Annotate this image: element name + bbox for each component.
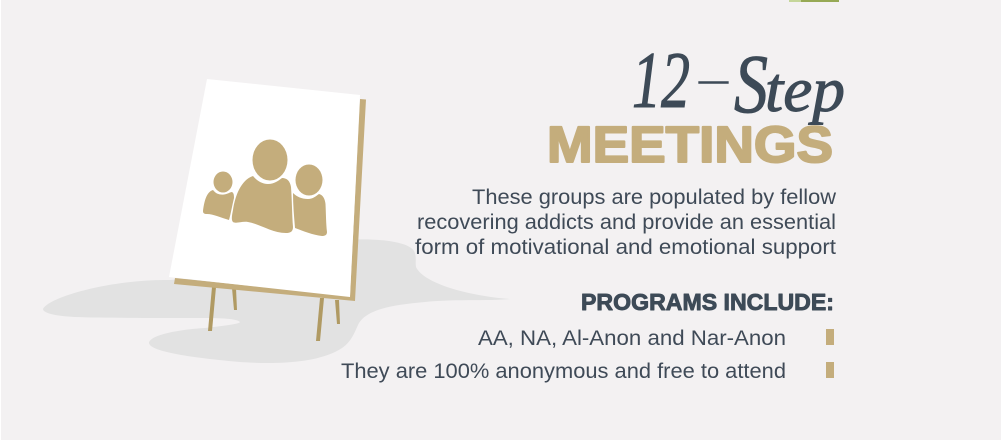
description paragraph: recovering addicts and provide an essential <box>417 210 836 234</box>
easel front legs <box>208 287 324 341</box>
description paragraph: form of motivational and emotional support <box>415 235 836 259</box>
white board <box>169 79 360 297</box>
title: MEETINGS: MEETINGS <box>547 116 833 173</box>
easel <box>169 79 366 341</box>
right person <box>293 164 327 236</box>
title: 12-Step: 12 <box>632 37 690 125</box>
description paragraph <box>415 185 836 259</box>
title: 12-Step: tep <box>765 54 845 125</box>
description paragraph: These groups are populated by fellow <box>472 185 836 209</box>
heading: programs include: PROGRAMS INCLUDE: <box>581 289 834 315</box>
icon: group of people <box>203 140 327 236</box>
list item 1: AA, NA, Al-Anon and Nar-Anon <box>478 326 786 350</box>
title: 12-Step <box>632 37 845 131</box>
centre person <box>232 140 293 233</box>
title: 12-Step: S <box>734 38 768 131</box>
grey floor shadow <box>43 239 510 363</box>
list item 2: They are 100% anonymous and free to attend <box>341 359 786 383</box>
green clipped fragment at top <box>789 0 839 2</box>
easel back legs <box>232 288 340 324</box>
title: 12-Step: – <box>698 56 729 101</box>
left person <box>203 172 234 220</box>
easel tan frame <box>174 99 366 301</box>
